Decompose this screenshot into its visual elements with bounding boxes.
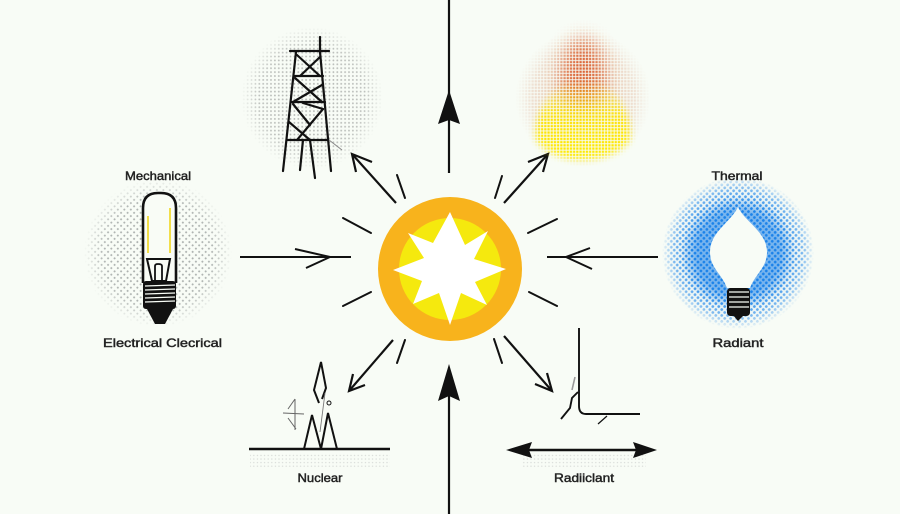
label: radiant: Radiant: [712, 336, 764, 350]
label: electrical: Electrical Clecrical: [103, 336, 222, 350]
icon: tube light bulb: [143, 193, 176, 324]
panel: mechanical and electrical bulb: [84, 169, 232, 350]
label: radiant lower: Radiiclant: [554, 471, 615, 485]
arrow: upper right: [504, 154, 548, 203]
arrow: top vertical: [438, 0, 460, 173]
label: mechanical: Mechanical: [125, 169, 191, 183]
panel: thermal and radiant bulb: [662, 169, 814, 350]
dotted band: [250, 453, 390, 467]
halftone heat circle: [515, 30, 651, 166]
icon: ground line with peaks: [249, 362, 390, 449]
arrow: left horizontal: [240, 249, 351, 268]
panel: tower: [241, 27, 383, 178]
icon: corner line with cracks: [561, 328, 640, 424]
sun outer ring: [378, 197, 522, 341]
arrow: bottom vertical: [438, 364, 460, 514]
arrow: lower right: [504, 336, 552, 391]
halftone circle: [241, 27, 383, 169]
blue halftone circle: [662, 177, 814, 329]
sun inner disc: [399, 218, 501, 320]
dotted band: [522, 454, 646, 467]
sun white star: [393, 212, 506, 325]
panel: radiant lower right: [506, 328, 657, 485]
faint strokes near tower: [329, 140, 342, 150]
blue glow: [662, 177, 814, 329]
panel: nuclear: [249, 362, 390, 485]
label: nuclear: Nuclear: [298, 471, 342, 485]
label: thermal: Thermal: [712, 169, 762, 183]
icon: small gray glyph: [283, 399, 304, 430]
panel: heat glow: [515, 30, 651, 166]
arrow: right horizontal: [547, 248, 658, 269]
halftone circle: [84, 179, 232, 327]
arrow: double headed: [506, 442, 657, 458]
sun rays: [343, 175, 557, 363]
icon: white drop bulb: [710, 207, 767, 321]
central sun: [378, 197, 522, 341]
arrow: lower left: [349, 340, 393, 391]
arrow: upper left: [352, 154, 396, 203]
icon: lattice tower: [283, 37, 331, 178]
